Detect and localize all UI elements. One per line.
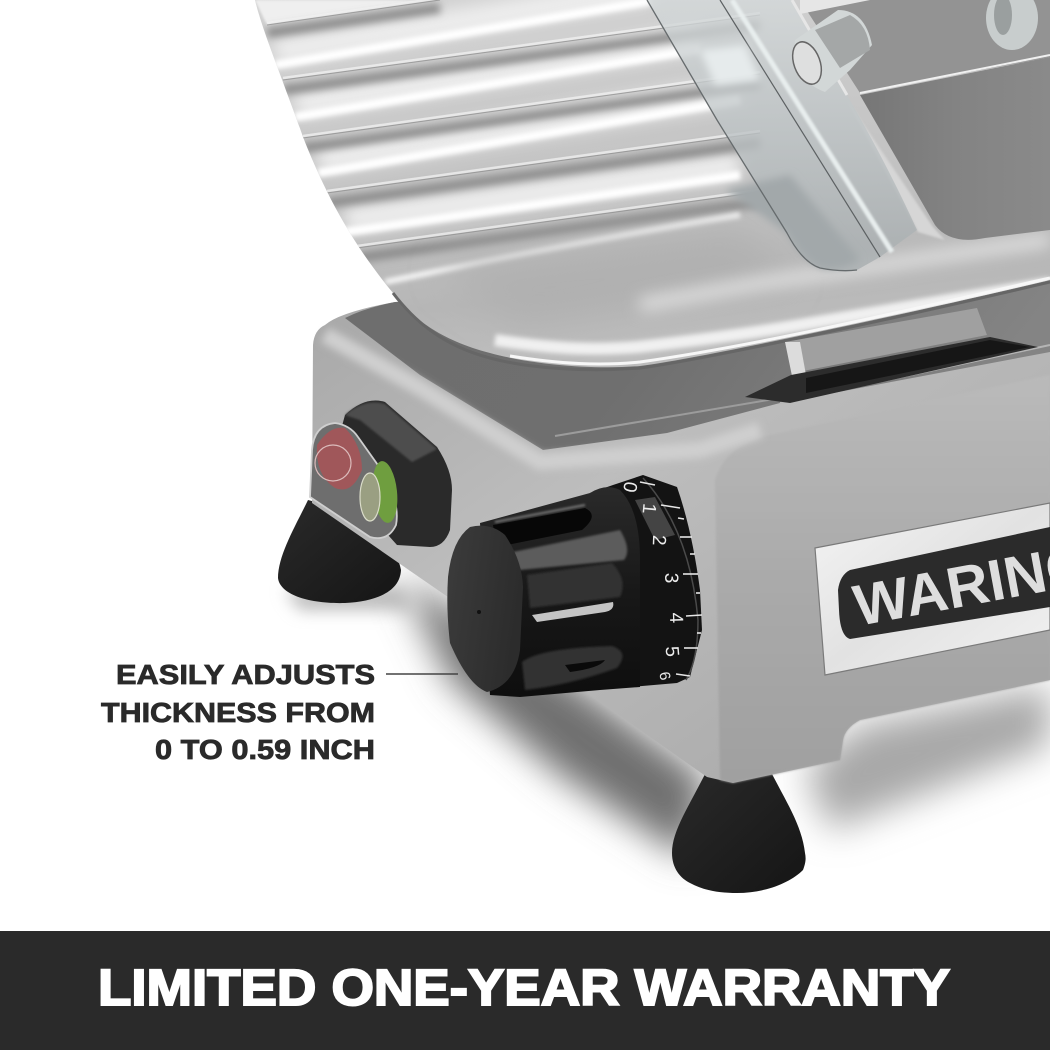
dial numbers: 2 bbox=[648, 535, 669, 546]
slicing tray bbox=[255, 0, 1050, 370]
dial numbers: 0 bbox=[618, 480, 641, 494]
warranty banner bbox=[0, 931, 1050, 1050]
dial numbers: 4 bbox=[665, 612, 686, 624]
nameplate bbox=[815, 503, 1050, 675]
icon: right rubber foot bbox=[672, 770, 806, 893]
switch housing bbox=[330, 401, 452, 547]
knob grip bbox=[480, 487, 640, 697]
clear plastic guard bbox=[647, 0, 1038, 271]
logo badge bbox=[838, 527, 1050, 639]
knob flutes bbox=[493, 508, 592, 547]
base silhouette bbox=[312, 270, 1050, 783]
thickness knob bbox=[447, 475, 702, 697]
green button bbox=[370, 460, 400, 524]
slicer base bbox=[312, 270, 1050, 783]
banner text: LIMITED ONE-YEAR WARRANTY bbox=[98, 959, 950, 1016]
callout text: EASILY ADJUSTS bbox=[116, 659, 375, 690]
base right face bbox=[715, 375, 1050, 783]
callout text: 0 TO 0.59 INCH bbox=[155, 734, 375, 765]
power switch bbox=[310, 401, 452, 547]
dial numbers bbox=[618, 480, 686, 682]
callout text bbox=[101, 659, 375, 765]
dial ring bbox=[590, 475, 702, 687]
floor shadow bbox=[285, 575, 1050, 860]
dial ticks bbox=[640, 482, 702, 676]
red button bbox=[317, 428, 362, 490]
knob cap bbox=[447, 526, 523, 692]
callout: thickness adjustment bbox=[101, 659, 458, 765]
dial numbers: 6 bbox=[655, 670, 674, 682]
dial numbers: 3 bbox=[660, 573, 681, 583]
dark blade panel bbox=[800, 0, 1050, 240]
dial numbers: 1 bbox=[638, 502, 659, 515]
callout leader line bbox=[386, 673, 458, 675]
callout text: THICKNESS FROM bbox=[101, 697, 375, 728]
switch front bbox=[310, 423, 397, 538]
base edge highlight bbox=[325, 335, 760, 462]
icon: left rubber foot bbox=[278, 500, 401, 603]
tray support bracket bbox=[745, 308, 1038, 403]
dial numbers: 5 bbox=[661, 645, 682, 658]
base top surface bbox=[345, 270, 1050, 450]
tray lower rim bbox=[495, 283, 1050, 349]
tray ridges bbox=[255, 0, 1050, 364]
guard knobs bbox=[787, 0, 1038, 92]
